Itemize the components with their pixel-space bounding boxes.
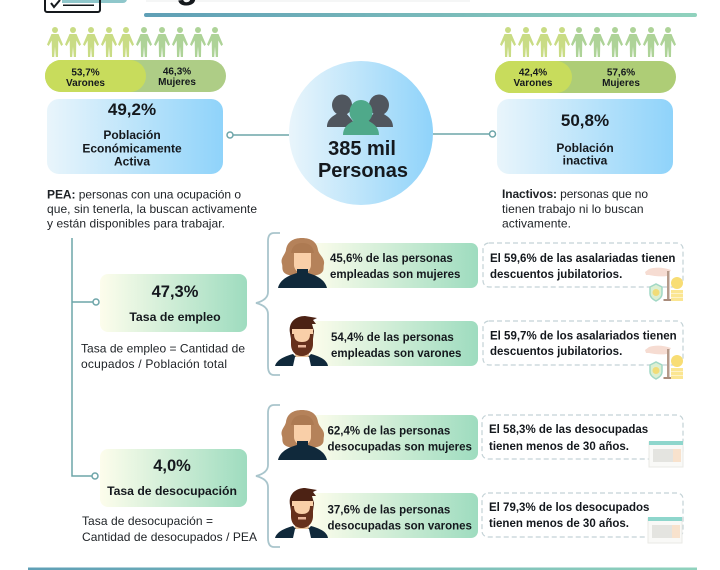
icon row: people left bbox=[47, 27, 223, 57]
callout: asalariados bbox=[483, 321, 683, 365]
icon: varón bbox=[275, 488, 328, 538]
icon row: people right bbox=[500, 27, 676, 57]
text block: definición PEA: que, sin tenerla, la buscan activamente bbox=[47, 202, 257, 216]
panel: tasa de empleo: 47,3% bbox=[152, 283, 199, 301]
icon: jubilación bbox=[645, 268, 683, 301]
callout: desocupadas jóvenes bbox=[482, 415, 683, 459]
brace: desocupación bbox=[256, 405, 280, 547]
footer bar bbox=[28, 568, 697, 570]
gender bar: PEA: 46,3% bbox=[163, 66, 191, 78]
gender bar: inactivos: 42,4% bbox=[519, 68, 547, 78]
gender bar: PEA: Mujeres bbox=[158, 77, 196, 88]
bar: desocupados varones: desocupadas son varones bbox=[328, 520, 472, 532]
icon: varón bbox=[275, 316, 328, 366]
icon: calendario bbox=[648, 517, 682, 543]
title underline bbox=[144, 13, 697, 17]
gender bar: PEA: 53,7% bbox=[71, 68, 100, 78]
gender bar: PEA bbox=[45, 60, 226, 92]
text block: definición PEA: y están disponibles para trabajar. bbox=[47, 216, 225, 230]
icon: jubilación bbox=[645, 346, 683, 379]
panel: población económicamente activa bbox=[47, 99, 223, 174]
bar: empleadas mujeres: 45,6% de las personas bbox=[330, 253, 453, 265]
bar: empleadas mujeres bbox=[310, 243, 478, 288]
bar: empleadas mujeres: empleadas son mujeres bbox=[330, 269, 460, 281]
callout: asalariadas: descuentos jubilatorios. bbox=[490, 269, 622, 281]
panel: población inactiva: Población bbox=[556, 141, 614, 155]
panel: tasa de desocupación: 4,0% bbox=[153, 457, 191, 475]
text block: definición PEA: PEA: personas con una ocupación o bbox=[47, 188, 241, 202]
bar: empleados varones: empleadas son varones bbox=[331, 348, 461, 360]
gender bar: PEA: Varones bbox=[66, 78, 105, 89]
connector: left bbox=[227, 132, 289, 138]
bar: desocupados varones: 37,6% de las personas bbox=[328, 504, 450, 516]
gender bar: inactivos: 57,6% bbox=[607, 68, 635, 78]
text block: fórmula empleo: Tasa de empleo = Cantidad de bbox=[81, 342, 245, 356]
callout: asalariados: descuentos jubilatorios. bbox=[490, 346, 622, 358]
gender bar: inactivos: Varones bbox=[514, 78, 553, 89]
bar: empleados varones bbox=[310, 321, 478, 366]
panel: total population circle: 385 mil bbox=[328, 138, 396, 160]
connector: right bbox=[433, 131, 496, 137]
panel: tasa de empleo: Tasa de empleo bbox=[129, 310, 221, 324]
callout: desocupadas jóvenes: El 58,3% de las desocupadas bbox=[489, 424, 648, 436]
bar: empleados varones: 54,4% de las personas bbox=[331, 332, 454, 344]
panel: tasa de empleo bbox=[100, 274, 247, 332]
text block: fórmula desocupación: Tasa de desocupación = bbox=[82, 514, 213, 528]
panel: población inactiva: inactiva bbox=[563, 154, 608, 168]
text block: fórmula desocupación bbox=[82, 514, 257, 544]
text block: fórmula empleo: ocupados / Población total bbox=[81, 357, 227, 371]
icon: clipboard (cropped header) bbox=[45, 0, 127, 12]
callout: desocupados jóvenes: tienen menos de 30 años. bbox=[489, 518, 629, 530]
connector: tree from PEA bbox=[72, 238, 99, 479]
brace: empleo bbox=[256, 233, 280, 375]
icon: mujer bbox=[278, 410, 327, 460]
callout: asalariadas bbox=[483, 243, 683, 287]
text block: definición inactivos: activamente. bbox=[502, 216, 571, 230]
panel: población económicamente activa: Económicamente bbox=[82, 142, 182, 156]
icon: mujer bbox=[278, 238, 327, 288]
gender bar: inactivos bbox=[495, 61, 676, 93]
icon: group of people bbox=[327, 94, 393, 135]
panel: total population circle: Personas bbox=[318, 160, 408, 182]
panel: población económicamente activa: Población bbox=[103, 128, 161, 142]
callout: desocupados jóvenes bbox=[482, 493, 683, 537]
icon: calendario bbox=[649, 441, 683, 467]
panel: tasa de desocupación: Tasa de desocupación bbox=[107, 484, 237, 498]
bar: desocupadas mujeres: desocupadas son mujeres bbox=[328, 442, 472, 454]
text block: definición inactivos: Inactivos: personas que no bbox=[502, 187, 648, 201]
panel: población económicamente activa: Activa bbox=[114, 154, 150, 168]
text block: fórmula empleo bbox=[81, 342, 245, 371]
gender bar: inactivos: Mujeres bbox=[602, 78, 640, 89]
callout: asalariadas: El 59,6% de las asalariadas tienen bbox=[490, 253, 675, 265]
panel: población inactiva bbox=[497, 99, 673, 174]
callout: desocupadas jóvenes: tienen menos de 30 años. bbox=[489, 441, 629, 453]
text block: definición PEA bbox=[47, 188, 257, 230]
text block: fórmula desocupación: Cantidad de desocupados / PEA bbox=[82, 530, 257, 544]
text block: definición inactivos: tienen trabajo ni lo buscan bbox=[502, 202, 644, 216]
callout: asalariados: El 59,7% de los asalariados tienen bbox=[490, 330, 677, 342]
callout: desocupados jóvenes: El 79,3% de los desocupados bbox=[489, 502, 649, 514]
bar: desocupados varones bbox=[310, 493, 478, 538]
panel: total population circle bbox=[289, 61, 433, 205]
bar: desocupadas mujeres: 62,4% de las personas bbox=[328, 426, 450, 438]
panel: población inactiva: 50,8% bbox=[561, 111, 609, 130]
bar: desocupadas mujeres bbox=[310, 415, 478, 460]
text block: definición inactivos bbox=[502, 187, 648, 230]
panel: tasa de desocupación bbox=[100, 449, 247, 507]
panel: población económicamente activa: 49,2% bbox=[108, 100, 156, 119]
